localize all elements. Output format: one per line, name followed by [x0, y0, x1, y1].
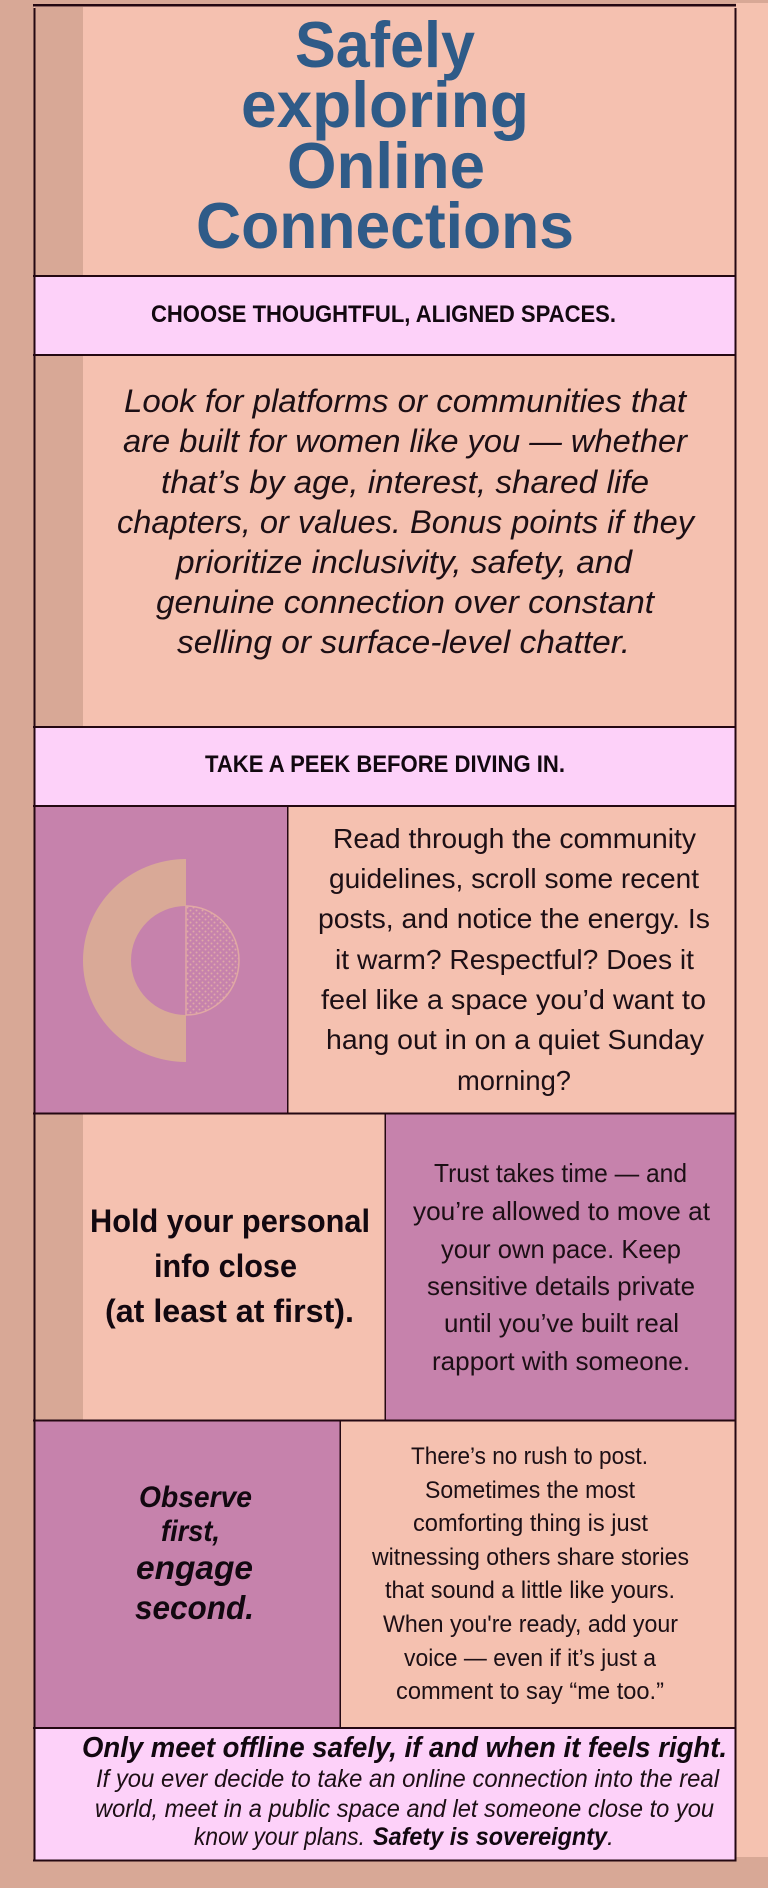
title: [196, 8, 574, 262]
icon: half ring and dotted half circle: [83, 859, 239, 1062]
text block: guidelines: Read through the community: [333, 823, 696, 854]
heading: choose spaces: CHOOSE THOUGHTFUL, ALIGNED SPACES.: [151, 301, 616, 328]
text block: meet in public: Safety is sovereignty: [373, 1823, 608, 1851]
text block: platforms: [117, 383, 696, 660]
panel: personal info text: [385, 1113, 736, 1420]
text block: platforms: genuine connection over constant: [156, 584, 655, 620]
title: Online: [287, 129, 485, 202]
panel: peek text: [288, 806, 736, 1113]
text block: meet in public: [95, 1765, 720, 1851]
text block: guidelines: morning?: [457, 1065, 571, 1096]
text block: guidelines: [318, 823, 710, 1096]
text block: trust takes time: rapport with someone.: [432, 1346, 690, 1376]
heading: observe first, engage second: Observe: [139, 1481, 252, 1514]
panel: choose spaces text: [34, 355, 736, 727]
title: Connections: [196, 189, 574, 262]
heading: peek: TAKE A PEEK BEFORE DIVING IN.: [205, 751, 565, 778]
text block: platforms: are built for women like you — whether: [123, 423, 688, 459]
text block: trust takes time: your own pace. Keep: [441, 1234, 681, 1264]
panel: meet offline: [34, 1728, 736, 1860]
heading: observe first, engage second: first,: [161, 1515, 220, 1548]
heading: observe first, engage second: engage: [136, 1549, 253, 1586]
heading: hold your personal info close: info close: [154, 1248, 297, 1284]
heading: hold your personal info close: (at least at first).: [105, 1293, 354, 1329]
text block: no rush to post: witnessing others share stories: [371, 1544, 689, 1571]
text block: platforms: chapters, or values. Bonus points if they: [117, 504, 696, 540]
text block: guidelines: feel like a space you’d want to: [321, 984, 706, 1015]
title: Safely: [295, 8, 475, 81]
text block: platforms: selling or surface-level chatter.: [177, 624, 630, 660]
text block: trust takes time: Trust takes time — and: [434, 1158, 687, 1188]
heading: observe first, engage second: [135, 1481, 254, 1626]
text block: no rush to post: When you're ready, add your: [383, 1611, 678, 1638]
panel: peek banner: [34, 727, 736, 806]
heading: hold your personal info close: Hold your personal: [90, 1203, 370, 1239]
text block: meet in public: know your plans.: [194, 1823, 365, 1851]
panel: observe heading: [34, 1420, 340, 1728]
heading: only meet offline: Only meet offline safely, if and when it feels right.: [82, 1732, 727, 1764]
text block: trust takes time: until you’ve built real: [444, 1308, 679, 1338]
text block: platforms: Look for platforms or communities that: [124, 383, 687, 419]
panel: personal info heading: [34, 1113, 385, 1420]
panel: observe text: [340, 1420, 736, 1728]
text block: no rush to post: voice — even if it’s just a: [404, 1645, 657, 1672]
text block: trust takes time: you’re allowed to move at: [413, 1196, 711, 1226]
text block: trust takes time: [413, 1158, 711, 1376]
text block: guidelines: guidelines, scroll some recent: [329, 863, 699, 894]
text block: no rush to post: comment to say “me too.”: [396, 1678, 664, 1705]
panel: choose spaces banner: [34, 276, 736, 355]
text block: guidelines: hang out in on a quiet Sunday: [326, 1024, 704, 1055]
text block: meet in public: .: [607, 1823, 614, 1851]
text block: no rush to post: [371, 1443, 689, 1705]
text block: no rush to post: comforting thing is just: [413, 1510, 648, 1537]
title: exploring: [241, 68, 529, 141]
text block: meet in public: world, meet in a public space and let someone close to you: [95, 1795, 714, 1823]
text block: no rush to post: that sound a little like yours.: [385, 1577, 675, 1604]
text block: guidelines: posts, and notice the energy. Is: [318, 903, 710, 934]
text block: meet in public: If you ever decide to take an online connection into the real: [96, 1765, 720, 1793]
text block: no rush to post: There’s no rush to post.: [411, 1443, 648, 1470]
text block: platforms: prioritize inclusivity, safety, and: [175, 544, 633, 580]
heading: observe first, engage second: second.: [135, 1589, 254, 1626]
text block: trust takes time: sensitive details private: [427, 1271, 695, 1301]
panel: header: [34, 6, 736, 276]
text block: platforms: that’s by age, interest, shared life: [161, 464, 649, 500]
panel: peek icon: [34, 806, 288, 1113]
text block: no rush to post: Sometimes the most: [425, 1477, 635, 1504]
heading: hold your personal info close: [90, 1203, 370, 1329]
text block: guidelines: it warm? Respectful? Does it: [335, 944, 694, 975]
